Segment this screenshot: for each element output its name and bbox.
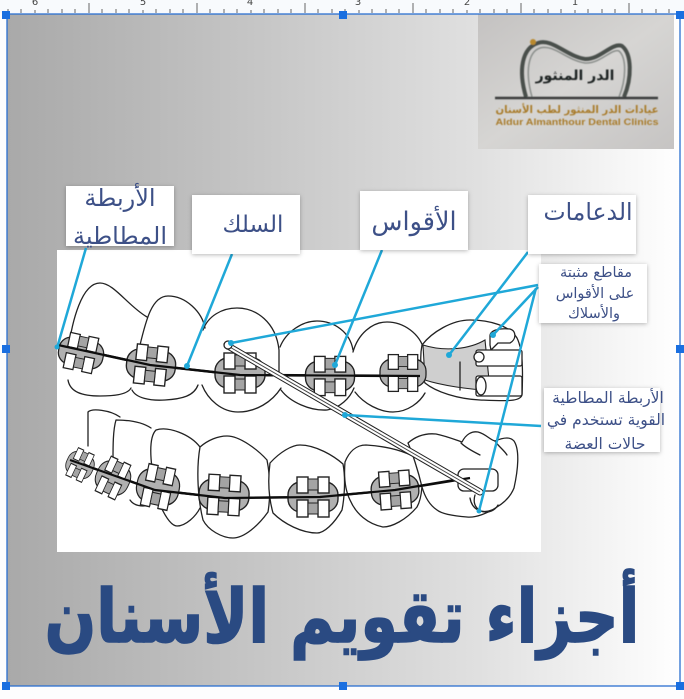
heavy elastic band bbox=[224, 341, 498, 512]
illustration: braces on teeth bbox=[55, 250, 541, 552]
label: clips on arches and wires: على الأقواس bbox=[556, 284, 634, 302]
title: أجزاء تقويم الأسنان bbox=[45, 568, 639, 661]
brackets upper bbox=[55, 331, 426, 396]
clinic logo bbox=[478, 14, 674, 149]
label: elastic ties: المطاطية bbox=[73, 222, 167, 250]
ruler bbox=[0, 0, 684, 13]
brackets lower bbox=[61, 446, 420, 517]
label: arches bbox=[360, 191, 468, 250]
label: brackets: الدعامات bbox=[543, 198, 633, 226]
label: strong elastics: حالات العضة bbox=[565, 435, 645, 453]
label: strong elastics bbox=[544, 388, 665, 453]
clinic logo: عيادات الدر المنثور لطب الأسنان bbox=[496, 103, 658, 116]
label: wire bbox=[192, 195, 300, 254]
label: clips on arches and wires: مقاطع مثبتة bbox=[560, 265, 632, 281]
upper teeth bbox=[68, 283, 522, 412]
archwires bbox=[58, 345, 470, 498]
label: brackets bbox=[528, 195, 636, 254]
label: strong elastics: القوية تستخدم في bbox=[547, 411, 665, 430]
lower teeth bbox=[88, 410, 518, 538]
label: elastic ties bbox=[66, 183, 174, 250]
clinic logo: الدر المنثور bbox=[535, 68, 614, 84]
clinic logo: Aldur Almanthour Dental Clinics bbox=[496, 117, 658, 127]
label: elastic ties: الأربطة bbox=[84, 183, 156, 212]
leader lines bbox=[54, 248, 541, 514]
label: arches: الأقواس bbox=[371, 204, 457, 237]
label: clips on arches and wires: والأسلاك bbox=[568, 304, 620, 322]
label: clips on arches and wires bbox=[539, 264, 647, 323]
label: wire: السلك bbox=[223, 212, 283, 238]
label: strong elastics: الأربطة المطاطية bbox=[552, 388, 664, 407]
